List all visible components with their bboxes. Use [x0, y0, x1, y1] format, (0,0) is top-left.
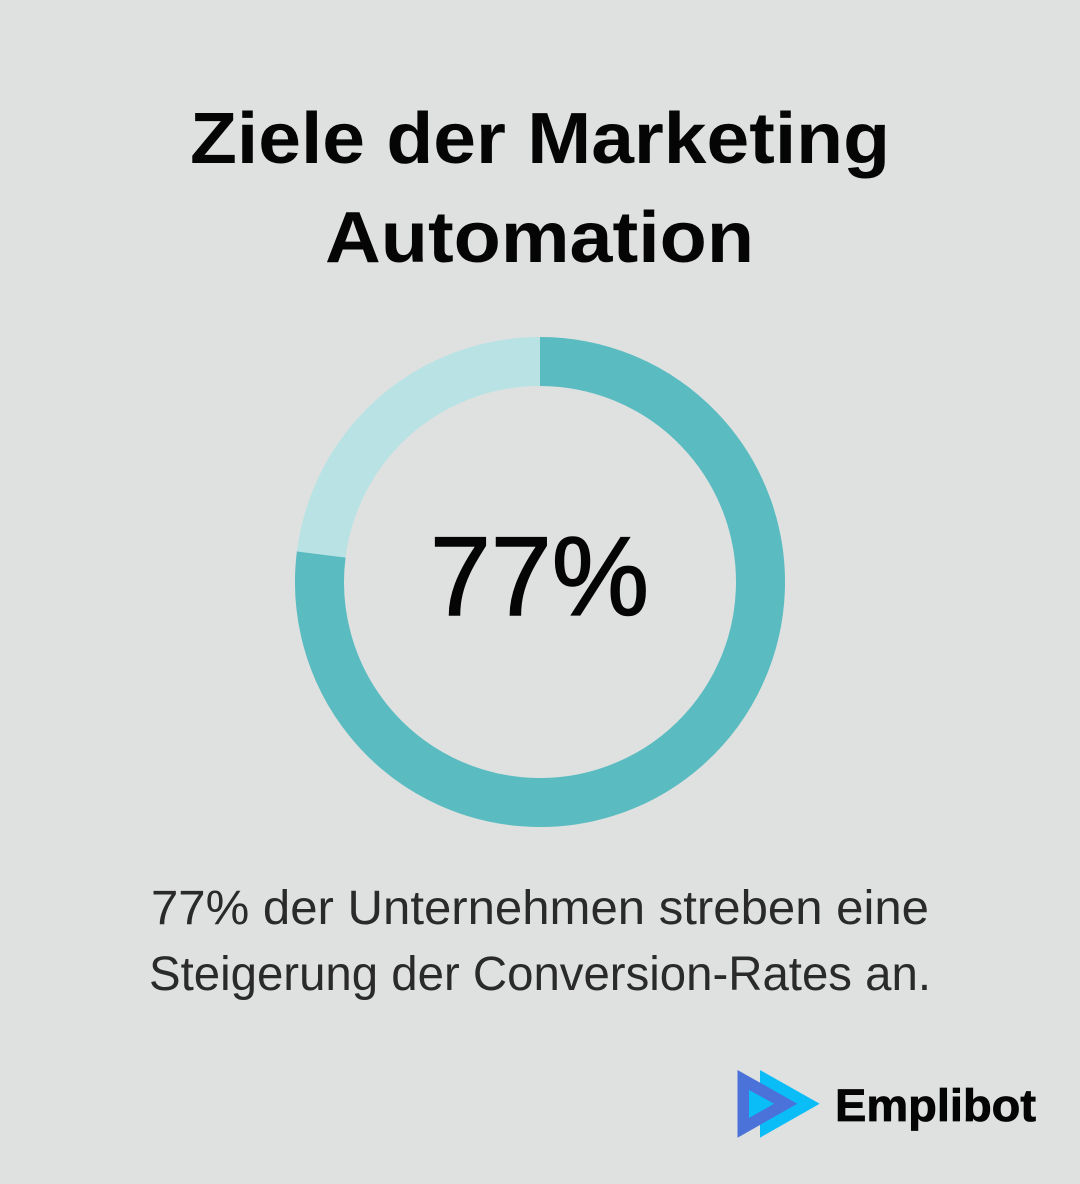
donut track: remaining 23%: [320, 362, 760, 802]
description text: [149, 882, 931, 1001]
title: Ziele der Marketing: [190, 99, 890, 179]
donut chart: 77%: [319, 362, 760, 802]
logo: Emplibot: [738, 1070, 1036, 1138]
icon: play triangles: [738, 1070, 820, 1138]
center value: 77%: [430, 514, 649, 639]
logo wordmark: Emplibot: [835, 1080, 1036, 1131]
title: Automation: [325, 198, 754, 278]
donut value: 77% arc: [319, 362, 760, 802]
description text: Steigerung der Conversion-Rates an.: [149, 948, 931, 1001]
title: [190, 99, 890, 278]
description text: 77% der Unternehmen streben eine: [151, 882, 929, 935]
